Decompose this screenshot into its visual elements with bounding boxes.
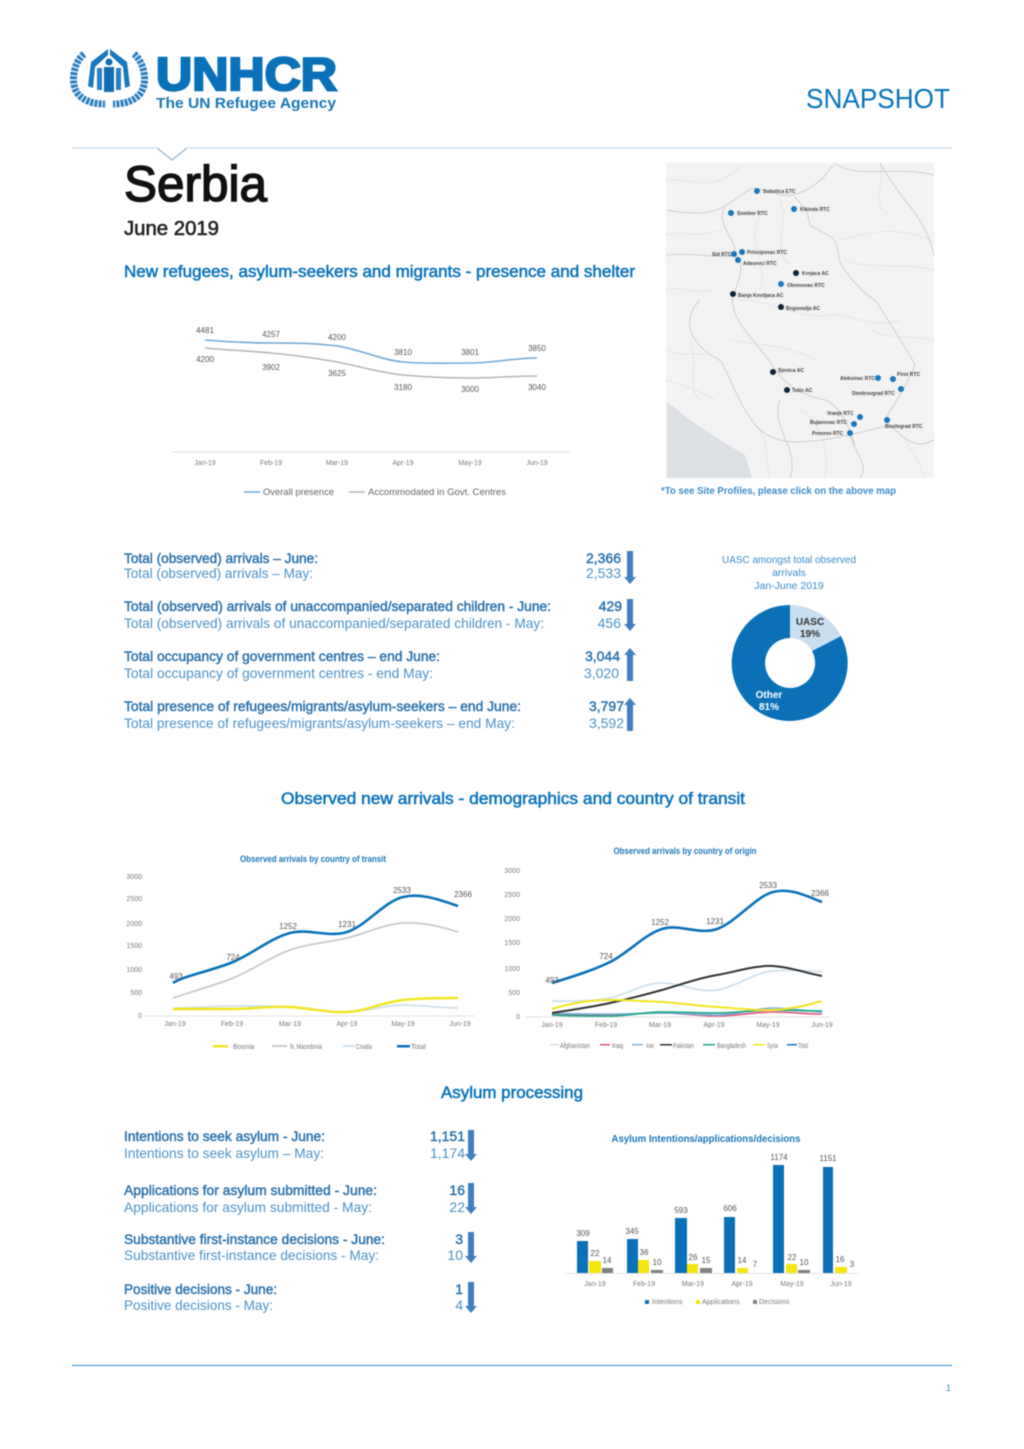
line: yellow series (173, 998, 458, 1012)
bar value labels: 345 (625, 1227, 639, 1236)
line: Iraq (552, 1012, 822, 1016)
data labels: 3625 (328, 369, 346, 378)
figure: positive decisions: 4 (455, 1297, 463, 1313)
donut labels: Other (756, 690, 782, 701)
y axis labels (504, 868, 520, 1021)
map site labels: Subotica ETC (763, 189, 796, 195)
bar value labels: 26 (689, 1253, 698, 1262)
figure: arrivals (124, 550, 636, 584)
figure: presence: 3,797 (589, 698, 624, 714)
panel: key figures (124, 550, 636, 731)
legend: Applications (702, 1299, 740, 1306)
x axis labels: Apr-19 (703, 1022, 725, 1029)
x axis labels (541, 1022, 833, 1029)
y axis labels: 1000 (126, 967, 142, 974)
chart title: Observed arrivals by country of transit (240, 854, 386, 864)
line: overall presence (205, 340, 537, 363)
figure: positive decisions: Positive decisions - June: (124, 1281, 277, 1297)
bar value labels: 22 (591, 1249, 600, 1258)
legend: Accommodated in Govt. Centres (368, 487, 507, 497)
legend: Bangladesh (717, 1043, 746, 1050)
data labels: 4200 (328, 333, 346, 342)
figure: applications: 16 (449, 1182, 465, 1198)
page number: 1 (946, 1383, 951, 1393)
map site labels: Krnjaca AC (802, 271, 829, 277)
header notch (157, 148, 187, 160)
data labels: 2366 (811, 889, 829, 898)
map site labels: Bogovadja AC (786, 306, 820, 312)
figure: applications: Applications for asylum submitted - May: (124, 1199, 372, 1215)
map site labels (712, 189, 923, 437)
data labels: 4481 (196, 326, 214, 335)
legend (244, 487, 507, 497)
heading: demographics: Observed new arrivals - demographics and country of transit (281, 789, 745, 808)
figure: presence: Total presence of refugees/migrants/asylum-seekers – end June: (124, 698, 521, 714)
figure: intentions: 1,174 (430, 1145, 465, 1161)
figure: positive decisions: 1 (455, 1281, 463, 1297)
bar value labels: 309 (576, 1229, 590, 1238)
data labels: 3810 (394, 348, 412, 357)
legend: Afghanistan (560, 1043, 590, 1050)
x axis labels (164, 1021, 471, 1028)
map site labels: Bujanovac RTC (810, 420, 847, 426)
x axis labels: Jan-19 (584, 1281, 606, 1288)
y axis labels: 3000 (504, 868, 520, 875)
map site labels: Adasevci RTC (743, 261, 777, 267)
legend: Decisions (759, 1299, 790, 1306)
legend: Bosnia (233, 1044, 255, 1051)
data labels: 1252 (651, 918, 669, 927)
data labels: 1252 (279, 922, 297, 931)
map site labels: Vranje RTC (827, 411, 854, 417)
chart title: Observed arrivals by country of origin (614, 846, 756, 856)
legend (550, 1043, 808, 1050)
y axis labels: 0 (138, 1013, 142, 1020)
donut title: UASC amongst total observed (722, 554, 856, 566)
bar value labels: 1151 (819, 1154, 837, 1163)
legend (645, 1299, 790, 1306)
x axis labels: Feb-19 (595, 1022, 617, 1029)
figure: presence (124, 698, 636, 731)
x axis labels: Feb-19 (221, 1021, 243, 1028)
axis labels: Apr-19 (392, 460, 414, 467)
figure: first-instance decisions: 3 (455, 1231, 463, 1247)
data labels: 493 (169, 972, 183, 981)
data labels (196, 326, 546, 394)
legend: Intentions (652, 1299, 683, 1306)
legend: Overall presence (263, 487, 334, 497)
legend: Total (411, 1044, 426, 1051)
map site labels: Sid RTC (712, 252, 732, 258)
map site labels: Sombor RTC (737, 211, 768, 217)
figure: applications (124, 1182, 477, 1215)
map site labels: Obrenovac RTC (787, 283, 825, 289)
figure: occupancy: Total occupancy of government centres – end June: (124, 648, 440, 664)
x axis labels: Mar-19 (682, 1281, 704, 1288)
map markers: asylum centres (730, 270, 799, 393)
x axis labels: May-19 (780, 1281, 804, 1288)
legend: Total (798, 1043, 808, 1050)
figure: arrivals: 2,533 (586, 565, 621, 581)
data labels: 3801 (461, 348, 479, 357)
map site labels: Bosilegrad RTC (885, 424, 923, 430)
donut labels: 81% (759, 702, 779, 713)
bars: applications (589, 1260, 847, 1273)
y axis labels: 2000 (126, 921, 142, 928)
map site labels: Tutin AC (792, 388, 813, 394)
y axis labels: 1000 (504, 966, 520, 973)
figure: presence: Total presence of refugees/migrants/asylum-seekers – end May: (124, 715, 515, 731)
donut labels: UASC (796, 617, 824, 628)
data labels: 1231 (338, 920, 356, 929)
map site labels: Kikinda RTC (800, 207, 830, 213)
axis labels (194, 460, 548, 467)
legend: N. Macedonia (290, 1044, 322, 1051)
data labels: 3850 (528, 344, 546, 353)
figure: unaccompanied children: 429 (599, 598, 622, 614)
line: total (173, 896, 458, 983)
legend: Syria (767, 1043, 778, 1050)
line: Iran (552, 1008, 822, 1015)
bar value labels: 3 (850, 1260, 855, 1269)
data labels: 493 (545, 976, 559, 985)
heading: asylum processing: Asylum processing (441, 1083, 583, 1102)
donut labels (756, 617, 824, 713)
x axis labels: Apr-19 (731, 1281, 753, 1288)
legend: Iraq (612, 1043, 623, 1050)
figure: occupancy: 3,044 (585, 648, 620, 664)
data labels (169, 886, 472, 981)
line: Afghanistan (552, 970, 822, 1001)
bars: intentions (577, 1165, 833, 1273)
donut slice: UASC (790, 605, 841, 651)
bar value labels: 14 (738, 1256, 747, 1265)
legend: Pakistan (673, 1043, 694, 1050)
UNHCR logo (73, 48, 337, 112)
footer rule (72, 1364, 952, 1366)
map site labels: Dimitrovgrad RTC (852, 391, 895, 397)
donut title (722, 554, 856, 592)
data labels (545, 881, 829, 985)
donut slice: other (732, 605, 848, 721)
y axis labels: 2500 (126, 896, 142, 903)
bar chart: asylum intentions, applications, decisions (565, 1133, 860, 1306)
heading: presence and shelter: New refugees, asylum-seekers and migrants - presence and shelter (124, 262, 635, 281)
x axis labels: May-19 (391, 1021, 415, 1028)
figure: positive decisions (124, 1281, 477, 1313)
line: Bulgaria and other (173, 923, 458, 998)
x axis labels (584, 1281, 852, 1288)
figure: unaccompanied children: Total (observed) arrivals of unaccompanied/separated children - June: (124, 598, 551, 614)
map site labels: Presevo RTC (812, 431, 844, 437)
snapshot label: SNAPSHOT (806, 83, 950, 114)
figure: applications: 22 (449, 1199, 465, 1215)
data labels: 724 (599, 952, 613, 961)
bar value labels: 593 (674, 1206, 688, 1215)
line: Pakistan (552, 966, 822, 1013)
logo tagline: The UN Refugee Agency (156, 95, 337, 112)
axis labels: Jan-19 (194, 460, 216, 467)
legend (213, 1044, 426, 1051)
line: Syria (552, 1000, 822, 1010)
y axis labels: 500 (508, 990, 520, 997)
data labels: 1231 (706, 917, 724, 926)
donut title: arrivals (772, 567, 806, 579)
x axis labels: Apr-19 (336, 1021, 358, 1028)
y axis labels: 1500 (504, 940, 520, 947)
line chart: presence and shelter (172, 326, 570, 497)
figure: first-instance decisions: 10 (447, 1247, 463, 1263)
x axis labels: Jun-19 (449, 1021, 471, 1028)
line: accommodated in government centres (205, 348, 537, 378)
line: Croatia and other (173, 1005, 458, 1012)
bar value labels: 606 (723, 1204, 737, 1213)
x axis labels: Jun-19 (830, 1281, 852, 1288)
map site labels: Banja Koviljaca AC (738, 293, 784, 299)
bar value labels: 7 (753, 1260, 758, 1269)
data labels: 3000 (461, 385, 479, 394)
y axis labels: 0 (516, 1014, 520, 1021)
map site labels: Pirot RTC (897, 372, 920, 378)
figure: arrivals: Total (observed) arrivals – May: (124, 565, 313, 581)
figure: first-instance decisions (124, 1231, 477, 1263)
map site labels: Aleksinac RTC (840, 376, 875, 382)
figure: intentions: Intentions to seek asylum – May: (124, 1145, 324, 1161)
map note: *To see Site Profiles, please click on the above map (661, 485, 896, 497)
data labels: 2533 (759, 881, 777, 890)
figure: arrivals: 2,366 (586, 550, 621, 566)
x axis labels: Jan-19 (164, 1021, 186, 1028)
bar value labels: 10 (800, 1258, 809, 1267)
map: site locations (666, 163, 934, 478)
data labels: 4257 (262, 330, 280, 339)
bar value labels: 14 (603, 1256, 612, 1265)
figure: intentions (124, 1128, 477, 1161)
figure: unaccompanied children: 456 (598, 615, 621, 631)
header rule (72, 147, 952, 149)
figure: unaccompanied children: Total (observed) arrivals of unaccompanied/separated children - May: (124, 615, 544, 631)
figure: unaccompanied children (124, 598, 636, 631)
figure: applications: Applications for asylum submitted - June: (124, 1182, 377, 1198)
line chart: arrivals by country of origin (504, 846, 833, 1050)
figure: arrivals: Total (observed) arrivals – June: (124, 550, 318, 566)
logo wordmark: UNHCR (156, 48, 337, 100)
x axis labels: Mar-19 (279, 1021, 301, 1028)
icon: UNHCR emblem (73, 49, 145, 104)
figure: first-instance decisions: Substantive first-instance decisions - June: (124, 1231, 385, 1247)
bar value labels: 36 (640, 1248, 649, 1257)
bar value labels: 22 (788, 1253, 797, 1262)
figure: intentions: Intentions to seek asylum - June: (124, 1128, 325, 1144)
y axis labels: 3000 (126, 874, 142, 881)
y axis labels: 2500 (504, 892, 520, 899)
data labels: 3040 (528, 383, 546, 392)
legend: Iran (646, 1043, 654, 1050)
title: Serbia (124, 156, 267, 212)
figure: occupancy: 3,020 (584, 665, 619, 681)
bars: decisions (602, 1268, 810, 1273)
bar value labels: 1174 (770, 1153, 788, 1162)
y axis labels (126, 874, 142, 1020)
line chart: arrivals by country of transit (126, 854, 475, 1051)
bar value labels: 10 (653, 1258, 662, 1267)
data labels: 2366 (454, 890, 472, 899)
figure: positive decisions: Positive decisions - May: (124, 1297, 273, 1313)
axis labels: Mar-19 (326, 460, 348, 467)
figure: occupancy (124, 648, 636, 681)
date: June 2019 (124, 218, 219, 240)
figure: intentions: 1,151 (430, 1128, 465, 1144)
bar value labels: 15 (702, 1256, 711, 1265)
legend: Croatia (356, 1044, 372, 1051)
y axis labels: 2000 (504, 916, 520, 923)
chart title: Asylum Intentions/applications/decisions (612, 1133, 801, 1145)
y axis labels: 1500 (126, 943, 142, 950)
donut chart: UASC share (722, 554, 856, 721)
data labels: 724 (226, 953, 240, 962)
x axis labels: May-19 (756, 1022, 780, 1029)
x axis labels: Jan-19 (541, 1022, 563, 1029)
donut title: Jan-June 2019 (754, 580, 824, 592)
figure: presence: 3,592 (589, 715, 624, 731)
figure: first-instance decisions: Substantive first-instance decisions - May: (124, 1247, 379, 1263)
map markers: transit and reception centres (728, 188, 904, 436)
data labels: 2533 (393, 886, 411, 895)
line: Bangladesh (552, 1010, 822, 1016)
axis labels: Jun-19 (526, 460, 548, 467)
x axis labels: Mar-19 (649, 1022, 671, 1029)
data labels: 4200 (196, 355, 214, 364)
map site labels: Sjenica AC (778, 368, 804, 374)
y axis labels: 500 (130, 990, 142, 997)
bar value labels (576, 1153, 855, 1269)
data labels: 3180 (394, 383, 412, 392)
panel: asylum figures (124, 1128, 477, 1313)
figure: occupancy: Total occupancy of government centres - end May: (124, 665, 433, 681)
donut labels: 19% (800, 629, 820, 640)
x axis labels: Feb-19 (633, 1281, 655, 1288)
axis labels: May-19 (458, 460, 482, 467)
data labels: 3902 (262, 363, 280, 372)
axis labels: Feb-19 (260, 460, 282, 467)
line: total (552, 891, 822, 983)
map site labels: Principovac RTC (747, 250, 787, 256)
bar value labels: 16 (836, 1255, 845, 1264)
x axis labels: Jun-19 (811, 1022, 833, 1029)
